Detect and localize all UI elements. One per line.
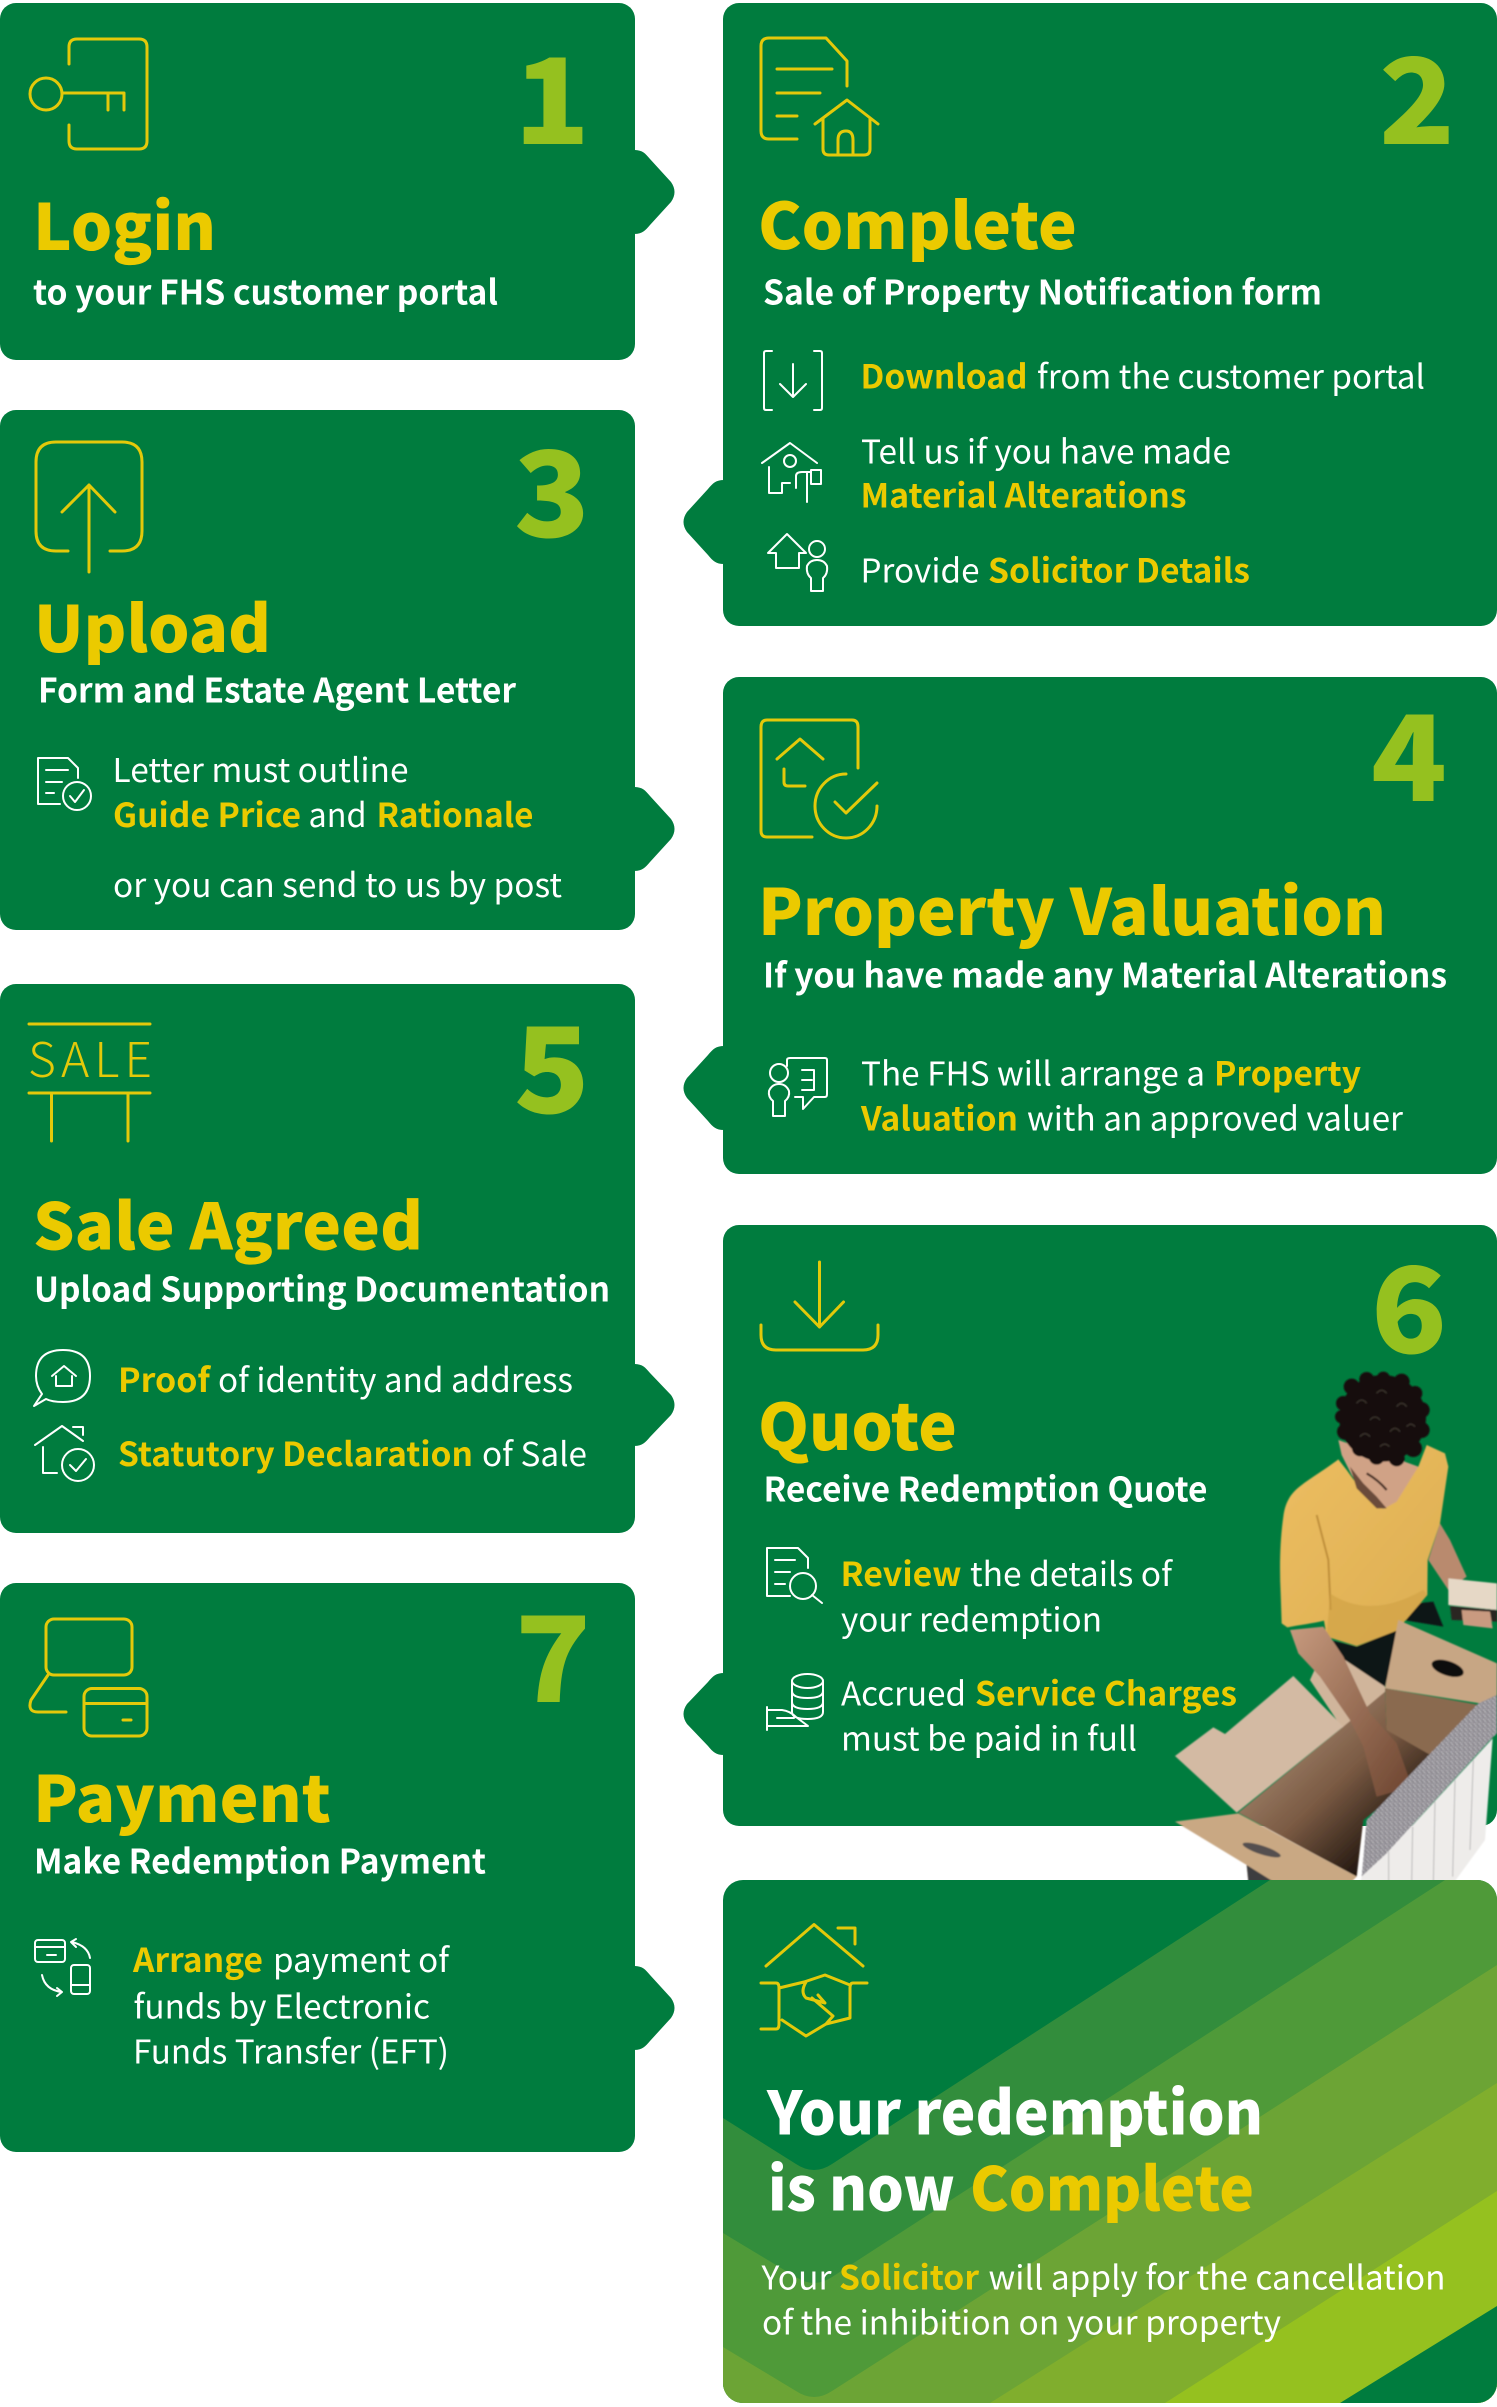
item: download: Download: [860, 350, 1028, 398]
panel: step 7 payment: [0, 1565, 674, 2152]
icon: house and person: [768, 534, 827, 591]
item: review: [840, 1548, 1173, 1642]
subheading: Sale of Property Notification form: [763, 266, 1322, 314]
item: valuation: with an approved valuer: [1027, 1092, 1403, 1140]
item: material alterations: [860, 426, 1231, 518]
item: material alterations: Material Alterations: [860, 470, 1186, 518]
panel: step 2 complete: [684, 3, 1497, 626]
heading: quote: Quote: [758, 1377, 957, 1469]
item: arrange payment: funds by Electronic: [134, 1980, 430, 2028]
subheading: If you have made any Material Alterations: [763, 948, 1447, 998]
icon: key and door: [30, 39, 147, 149]
item: review: Review: [840, 1548, 962, 1596]
text: solicitor note: Solicitor: [839, 2252, 980, 2300]
heading: complete: Complete: [758, 176, 1077, 268]
icon: document search: [767, 1548, 822, 1603]
item: guide price and rationale: Guide Price: [113, 789, 301, 837]
icon: upload: [36, 442, 142, 572]
panel: step 4 property valuation: [684, 664, 1497, 1174]
item: solicitor details: Provide: [860, 544, 980, 592]
icon: coins and hand: [767, 1674, 823, 1730]
icon: document and house: [761, 38, 878, 155]
item: review: the details of: [970, 1548, 1173, 1596]
subheading: Upload Supporting Documentation: [34, 1262, 610, 1312]
panel: step 5 sale agreed: [0, 976, 674, 1533]
item: guide price and rationale: Rationale: [376, 789, 534, 837]
icon: house check: [35, 1426, 94, 1481]
icon: download bracket: [764, 351, 822, 410]
subheading: Make Redemption Payment: [34, 1834, 486, 1884]
item: statutory declaration: Statutory Declaration: [118, 1428, 473, 1476]
subheading: Receive Redemption Quote: [764, 1462, 1208, 1512]
item: statutory declaration: of Sale: [482, 1428, 587, 1476]
item: service charges: must be paid in full: [841, 1712, 1137, 1760]
item: guide price and rationale: and: [308, 789, 366, 837]
icon: document with check: [38, 758, 91, 810]
item: arrange payment: [132, 1934, 450, 2074]
step number 2: 2: [1379, 7, 1455, 179]
icon: valuer with speech bubble: [769, 1058, 827, 1116]
heading: sale agreed: Sale Agreed: [33, 1176, 423, 1268]
panel: step 6 quote: [684, 1216, 1497, 1826]
step number 6: 6: [1371, 1216, 1447, 1388]
item: review: your redemption: [841, 1594, 1102, 1642]
icon: download tray: [761, 1262, 878, 1350]
illustration: man unpacking box: [1175, 1372, 1497, 1883]
panel: step 1 login: [0, 3, 674, 360]
subheading: Form and Estate Agent Letter: [38, 664, 516, 712]
item: valuation: Property: [1214, 1048, 1361, 1096]
item: service charges: [841, 1668, 1237, 1760]
icon: sale sign: [28, 1021, 152, 1141]
item: guide price and rationale: Letter must outline: [112, 744, 408, 792]
icon: sale sign: SALE: [28, 1021, 152, 1091]
icon: house alterations: [762, 443, 821, 502]
text: solicitor note: Your: [760, 2252, 832, 2300]
heading: your redemption is now complete: Complete: [970, 2142, 1254, 2228]
item: arrange payment: Funds Transfer (EFT): [133, 2026, 449, 2074]
step number 5: 5: [514, 976, 590, 1148]
item: proof: Proof: [118, 1354, 212, 1402]
heading: payment: Payment: [33, 1749, 331, 1841]
item: valuation: The FHS will arrange a: [861, 1048, 1205, 1096]
heading: property valuation: Property Valuation: [758, 862, 1386, 954]
item: valuation: [860, 1048, 1403, 1140]
step number 3: 3: [514, 400, 590, 572]
icon: card to phone transfer: [35, 1939, 90, 1996]
item: valuation: Valuation: [860, 1092, 1018, 1140]
text: solicitor note: [760, 2252, 1446, 2344]
text: solicitor note: of the inhibition on your property: [762, 2296, 1281, 2344]
step number 7: 7: [515, 1565, 591, 1737]
heading: your redemption is now complete: Your redemption: [766, 2066, 1263, 2152]
heading: your redemption is now complete: [766, 2066, 1263, 2228]
item: material alterations: Tell us if you have made: [861, 426, 1231, 474]
heading: login: Login: [33, 177, 216, 269]
panel: redemption complete: [723, 1880, 1497, 2407]
icon: speech bubble house: [34, 1350, 90, 1406]
item: service charges: Service Charges: [975, 1668, 1237, 1716]
item: solicitor details: [860, 544, 1250, 592]
step number 4: 4: [1371, 664, 1447, 836]
item: proof: of identity and address: [218, 1354, 573, 1402]
subheading: to your FHS customer portal: [33, 266, 498, 314]
text: solicitor note: will apply for the cancellation: [988, 2252, 1446, 2300]
item: arrange payment: payment of: [273, 1934, 450, 1982]
item: guide price and rationale: [112, 744, 534, 837]
item: download: [860, 350, 1425, 398]
item: service charges: Accrued: [841, 1668, 966, 1716]
icon: computer and card: [30, 1619, 147, 1736]
item: solicitor details: Solicitor Details: [988, 544, 1250, 592]
item: arrange payment: Arrange: [132, 1934, 263, 1982]
item: post: or you can send to us by post: [113, 859, 562, 907]
step number 1: 1: [514, 7, 590, 179]
panel: step 3 upload: [0, 400, 674, 930]
heading: upload: Upload: [34, 579, 271, 671]
heading: your redemption is now complete: is now: [768, 2142, 955, 2228]
icon: house with check: [761, 720, 877, 838]
item: download: from the customer portal: [1037, 350, 1425, 398]
icon: house handshake: [761, 1924, 867, 2036]
